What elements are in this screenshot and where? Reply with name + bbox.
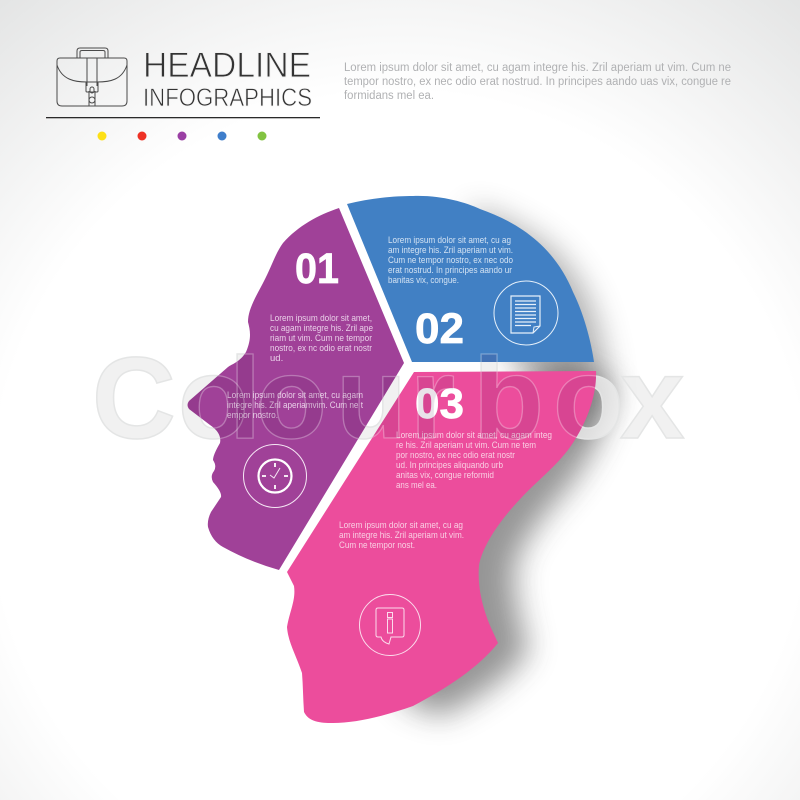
text block: blue: Cum ne tempor nostro, ex nec odo (388, 255, 513, 266)
head infographic (188, 196, 596, 723)
colour dots (98, 132, 266, 140)
text block: purple upper (270, 313, 373, 364)
head shadow: lower, behind pink neck (400, 360, 612, 716)
text block: pink upper: ud. In principes aliquando urb (396, 460, 503, 471)
icon: info speech bubble (360, 594, 420, 656)
text block: purple lower: Lorem ipsum dolor sit amet, cu agam (227, 390, 363, 401)
text block: pink lower: am integre his. Zril aperiam ut vim. (339, 530, 464, 541)
text block: pink upper: ans mel ea. (396, 480, 437, 491)
panel: blue segment 02 (347, 196, 594, 362)
intro paragraph: formidans mel ea. (344, 90, 434, 102)
text block: pink upper (396, 430, 552, 491)
text block: purple upper: Lorem ipsum dolor sit amet, (270, 313, 372, 324)
text block: blue: erat nostrud. In principes aando ur (388, 265, 512, 276)
subtitle: INFOGRAPHICS: INFOGRAPHICS (143, 84, 312, 112)
text block: purple lower (227, 390, 363, 421)
text block: pink lower: Cum ne tempor nost. (339, 540, 415, 551)
text block: blue: am integre his. Zril aperiam ut vim. (388, 245, 513, 256)
text block: purple upper: nostro, ex nc odio erat nostr (270, 343, 372, 354)
intro paragraph: tempor nostro, ex nec odio erat nostrud. In principes aando uas vix, congue re (344, 76, 731, 88)
watermark letters behind the head: Colourbox (92, 333, 685, 463)
number 03: 03 (415, 380, 464, 428)
head shadow: upper, behind blue segment (470, 208, 608, 440)
number 01: 01 (295, 245, 339, 293)
text block: pink upper: anitas vix, congue reformid (396, 470, 494, 481)
number 02: 02 (415, 305, 464, 353)
icon: document (494, 281, 558, 345)
intro paragraph: Lorem ipsum dolor sit amet, cu agam integre his. Zril aperiam ut vim. Cum ne (344, 62, 731, 74)
rule (46, 117, 320, 118)
text block: pink upper: por nostro, ex nec odio erat nostr (396, 450, 515, 461)
text block: purple upper: cu agam integre his. Zril ape (270, 323, 373, 334)
text block: purple lower: empor nostro. (227, 410, 278, 421)
text block: purple lower: integre his. Zril aperiamvim. Cum ne t (227, 400, 363, 411)
text block: pink lower (339, 520, 464, 551)
header (46, 46, 731, 140)
text block: blue: banitas vix, congue. (388, 275, 459, 286)
text block: blue (388, 235, 513, 286)
text block: pink lower: Lorem ipsum dolor sit amet, cu ag (339, 520, 463, 531)
text block: pink upper: Lorem ipsum dolor sit amet, cu agam integ (396, 430, 552, 441)
panel: pink segment 03 (287, 371, 596, 723)
intro paragraph (344, 62, 731, 102)
text block: purple upper: riam ut vim. Cum ne tempor (270, 333, 372, 344)
text block: purple upper: ud. (270, 353, 283, 364)
panel: purple segment 01 (188, 208, 404, 570)
text block: blue: Lorem ipsum dolor sit amet, cu ag (388, 235, 511, 246)
icon: briefcase (57, 48, 127, 106)
watermark over the head: Colourbox (92, 333, 685, 463)
title: HEADLINE: HEADLINE (143, 46, 311, 85)
icon: clock (244, 444, 306, 508)
text block: pink upper: re his. Zril aperiam ut vim. Cum ne tem (396, 440, 536, 451)
